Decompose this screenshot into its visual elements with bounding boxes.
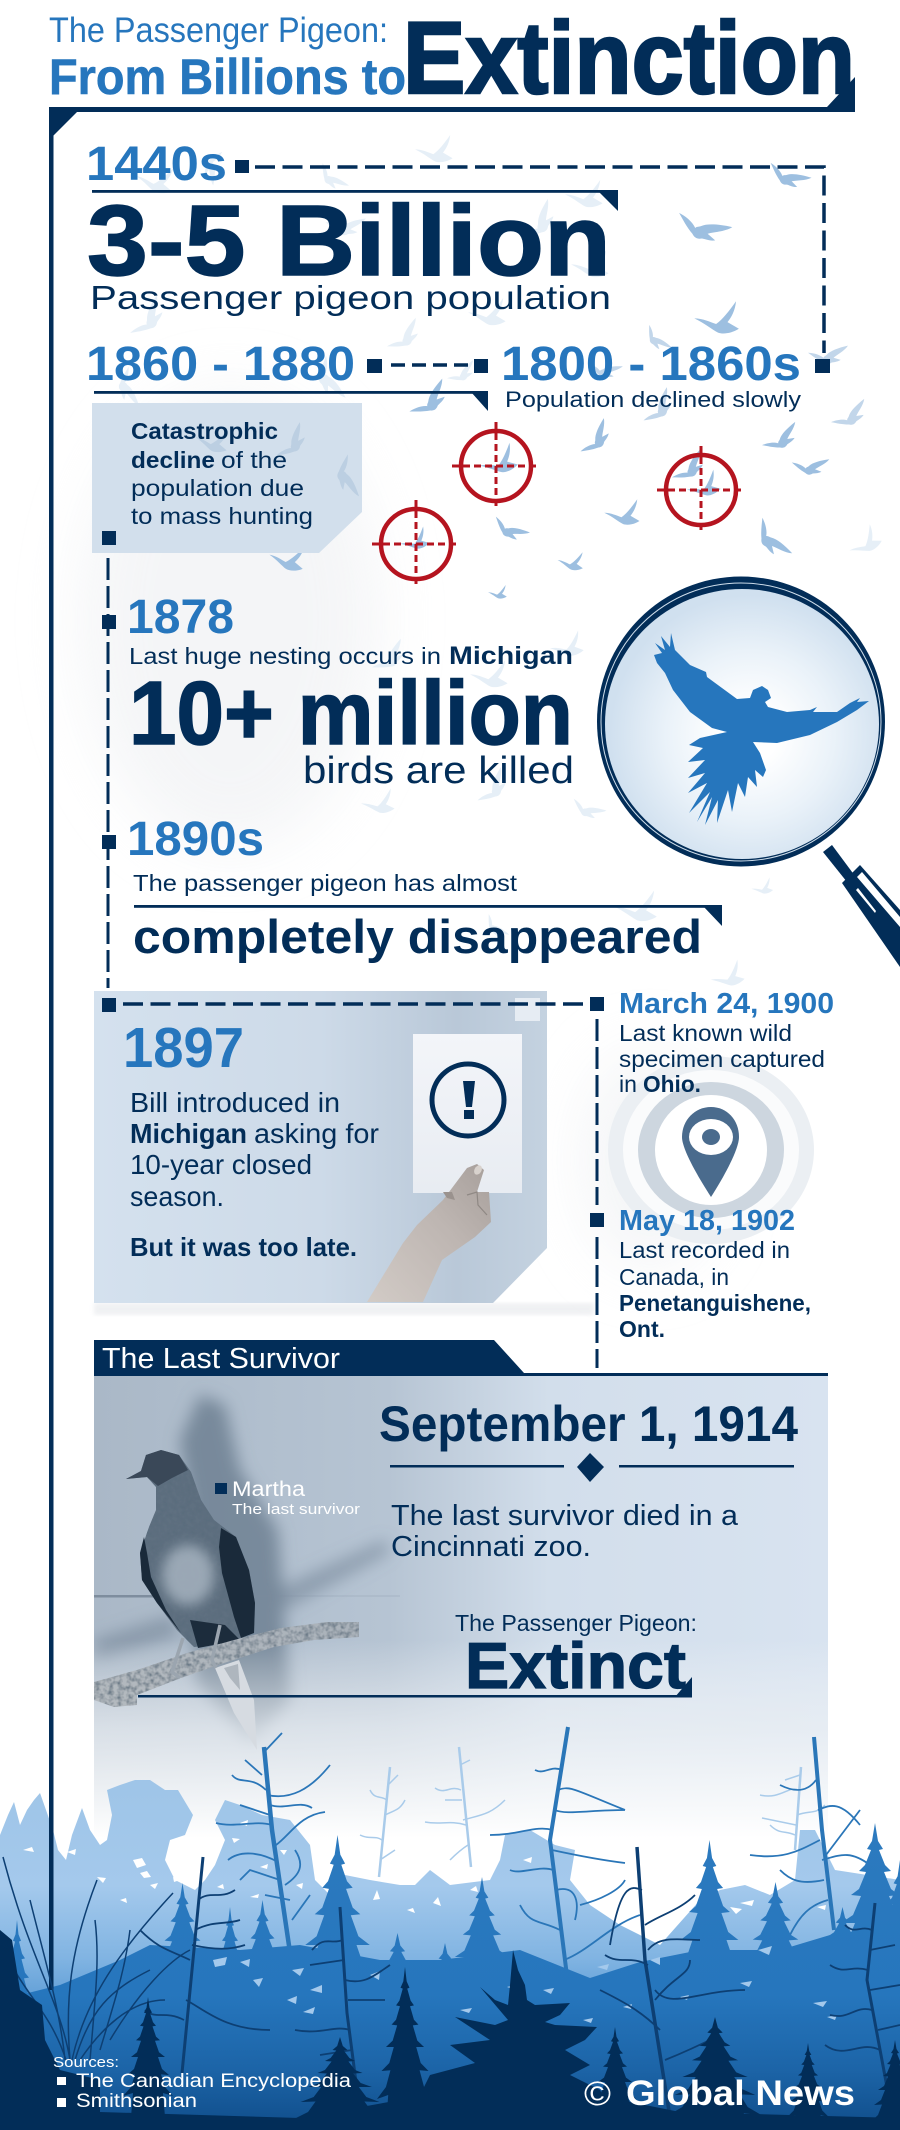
big number: 3-5 Billion: [87, 185, 611, 297]
credit: Global News: ©: [584, 2075, 611, 2113]
1878 section: [127, 591, 574, 792]
title: [49, 1, 855, 115]
dark bare trees: [3, 1847, 900, 2130]
March 24 1900 entry: [619, 988, 834, 1097]
bill description: Michigan: [130, 1118, 247, 1149]
wall shadows in photo: [94, 1395, 400, 1745]
dark wings: [219, 1528, 255, 1638]
scattered flock of pigeons: [111, 135, 883, 991]
icon: location pin with rings: [608, 1056, 814, 1244]
forest illustration: [0, 1700, 900, 2130]
callout: catastrophic decline: decline: [131, 447, 215, 473]
March 24 1900 entry: March 24, 1900: [619, 988, 834, 1020]
mid blue spruces: [13, 1823, 900, 2118]
conclusion: Extinct: The Passenger Pigeon:: [455, 1610, 697, 1636]
callout: catastrophic decline: to mass hunting: [131, 503, 313, 529]
icon: hunting crosshairs: [372, 422, 745, 587]
description: The last survivor died in a: [391, 1500, 739, 1532]
fade to white: [94, 1640, 828, 1860]
bill description: season.: [130, 1181, 224, 1212]
magnifying glass with pigeon: [597, 576, 900, 967]
bill description: 10-year closed: [130, 1149, 312, 1180]
title line 1: The Passenger Pigeon:: [49, 11, 388, 50]
hand holding sign: [367, 1164, 491, 1302]
chest highlight: [162, 1545, 214, 1605]
1860-1880 date: [86, 338, 488, 411]
body: [126, 1450, 255, 1647]
population stat: [87, 185, 618, 316]
1878 section: Last huge nesting occurs in: [129, 643, 441, 669]
label: Martha: Martha: [232, 1478, 305, 1501]
1440s date and connector: [86, 138, 824, 353]
white gaps in pale trees: [23, 1820, 831, 1980]
frame line over forest: [49, 1780, 54, 1990]
May 18 1902 entry: Penetanguishene,: [619, 1290, 811, 1316]
1878 section: Michigan: [449, 642, 573, 670]
vertical timeline: [102, 558, 116, 988]
date: 1897: 1897: [123, 1016, 244, 1080]
title word: Extinction: Extinction: [403, 1, 855, 115]
callout: catastrophic decline: Catastrophic: [131, 418, 278, 444]
March 24 1900 entry: Ohio.: [643, 1071, 701, 1097]
label: Martha: [215, 1478, 360, 1518]
stat: 10+ million: 10+ million: [129, 664, 573, 764]
May 18 1902 entry: [619, 1205, 811, 1342]
bill description: asking for: [254, 1118, 379, 1149]
pigeon silhouette: [654, 633, 869, 825]
date: 1440s: 1440s: [86, 138, 227, 191]
tail: [215, 1660, 257, 1750]
blue bare trees: [216, 1727, 870, 2000]
March 24 1900 entry: Last known wild: [619, 1020, 792, 1046]
head shade: [126, 1450, 188, 1486]
bill description: Bill introduced in: [130, 1087, 340, 1118]
caption: Passenger pigeon population: [90, 279, 611, 316]
callout: catastrophic decline: of the: [221, 447, 287, 473]
1878 section: birds are killed: [303, 750, 574, 792]
credit: Global News: Global News: [626, 2074, 855, 2113]
lens: [597, 576, 885, 866]
feet: [172, 1625, 220, 1678]
dark foreground spruces: [0, 1930, 900, 2130]
conclusion: Extinct: Extinct: [465, 1629, 686, 1702]
callout: catastrophic decline: population due: [131, 475, 304, 501]
caption: Population declined slowly: [505, 387, 801, 412]
pale bare trees behind: [360, 1747, 825, 1877]
March 24 1900 entry: in: [619, 1071, 637, 1097]
panel: the last survivor: [94, 1340, 828, 1860]
bill description: [130, 1087, 379, 1262]
branch: [94, 1622, 359, 1707]
paper sign: [413, 1034, 522, 1193]
photo of Martha: [94, 1450, 359, 1750]
sources: Sources:: [53, 2054, 119, 2071]
pale back treeline: [0, 1780, 897, 1993]
panel background: [94, 1375, 828, 1855]
marker: [815, 359, 830, 373]
sources: The Canadian Encyclopedia: [76, 2071, 351, 2092]
1890s section: [127, 813, 722, 963]
divider with diamond: [390, 1453, 794, 1482]
handle: [823, 845, 900, 967]
description: Cincinnati zoo.: [391, 1531, 591, 1563]
panel shadow: [94, 1303, 594, 1315]
May 18 1902 entry: Ont.: [619, 1316, 665, 1342]
tab: [94, 1340, 828, 1376]
1800-1860s date: 1800 - 1860s: [501, 338, 801, 391]
connector to 1900: [102, 997, 604, 1368]
May 18 1902 entry: Last recorded in: [619, 1237, 790, 1263]
1860-1880 date: 1860 - 1880: [86, 338, 355, 391]
description: [391, 1500, 739, 1563]
title line 2: From Billions to: [49, 49, 406, 105]
soft background glow: [80, 390, 720, 1270]
1890s section: completely disappeared: [133, 910, 702, 963]
dashed connector: [255, 167, 824, 353]
bill description: But it was too late.: [130, 1232, 357, 1262]
May 18 1902 entry: May 18, 1902: [619, 1205, 795, 1237]
conclusion: Extinct: [138, 1610, 697, 1702]
March 24 1900 entry: specimen captured: [619, 1046, 825, 1072]
tab: The Last Survivor: [102, 1343, 340, 1375]
panel: 1897 bill: [94, 991, 594, 1315]
date: September 1, 1914: September 1, 1914: [379, 1396, 798, 1452]
sources: [53, 2054, 351, 2112]
callout: catastrophic decline: [92, 403, 369, 553]
label: Martha: The last survivor: [232, 1501, 360, 1518]
1890s section: 1890s: [127, 813, 264, 866]
panel background: [94, 991, 547, 1303]
marker: [235, 160, 249, 173]
pale gaps in mid trees: [213, 1946, 837, 2023]
sources: Smithsonian: [76, 2091, 197, 2112]
May 18 1902 entry: Canada, in: [619, 1264, 729, 1290]
1878 section: 1878: [127, 591, 234, 644]
icon: exclamation: [432, 1064, 504, 1136]
1800-1860s date: [501, 338, 830, 412]
1890s section: The passenger pigeon has almost: [133, 870, 518, 896]
